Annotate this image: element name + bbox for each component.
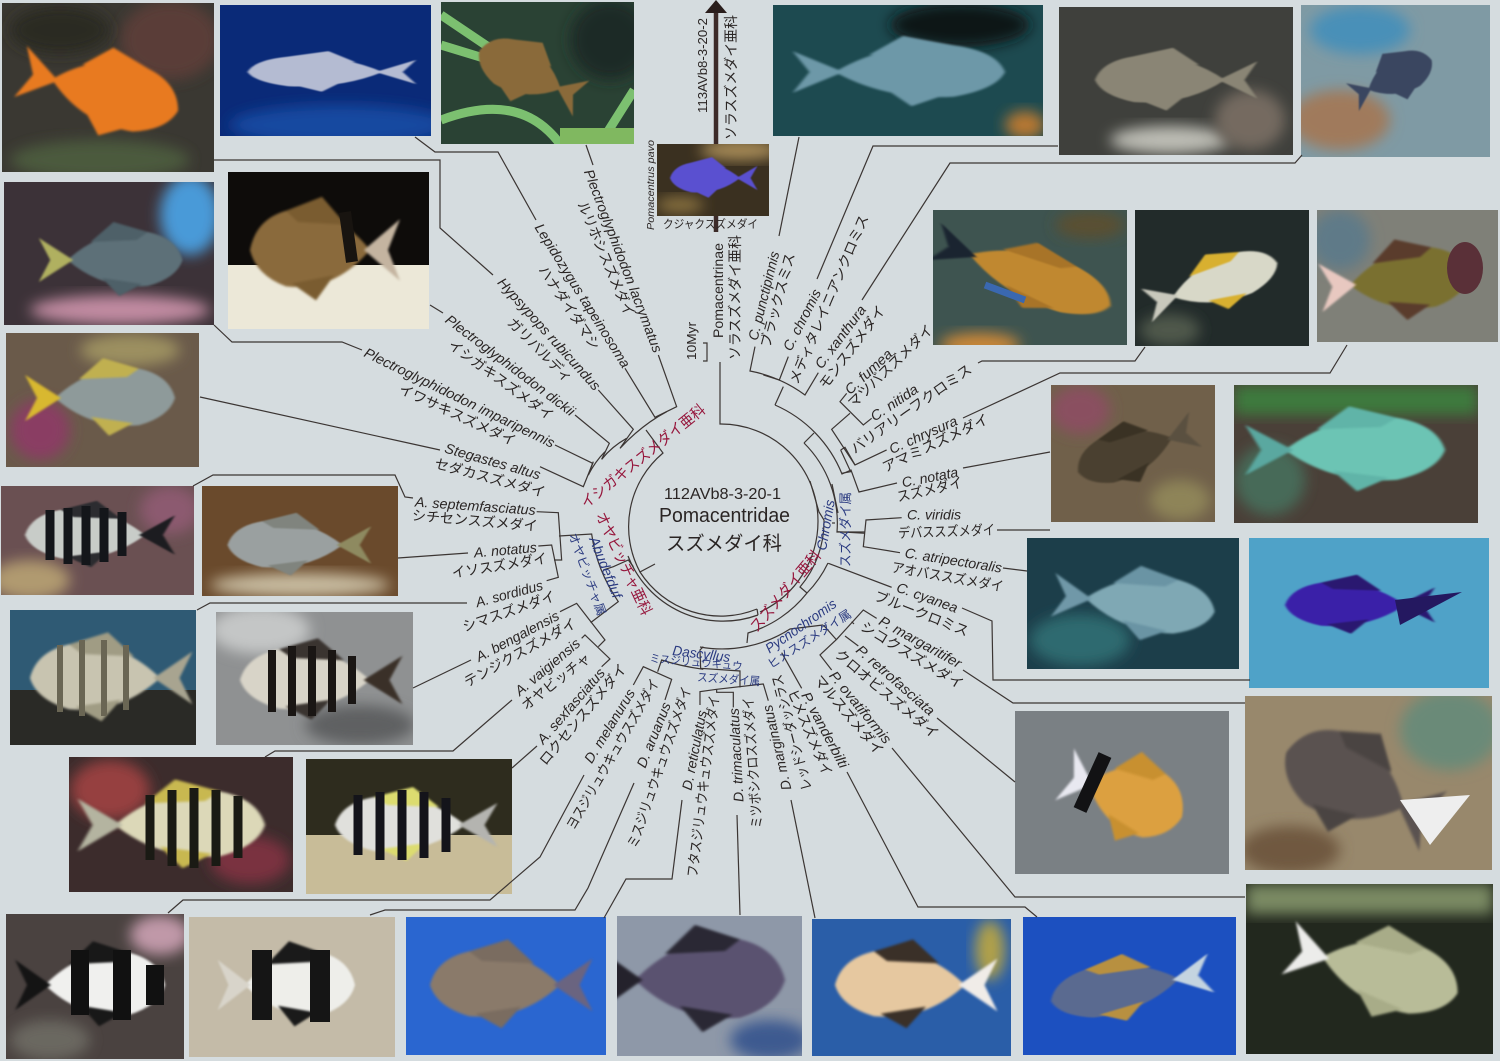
species label: A. notatus: A. notatus (472, 539, 537, 561)
center title: スズメダイ科 (666, 533, 782, 555)
photo: P. vanderbilti (1023, 917, 1236, 1055)
species label: P. vanderbilti: ヒメスズメダイ (785, 687, 835, 778)
subfamily labels: オヤビッチャ亜科 (592, 510, 655, 618)
genus label Dascyllus: ミスジリュウキュウ (649, 652, 743, 673)
top clade label (695, 15, 739, 140)
photo: Hypsypops rubicundus (4, 182, 214, 325)
photo: C. xanthura (1301, 5, 1490, 157)
photo: C. cyanea (1249, 538, 1489, 688)
photo: D. aruanus (189, 917, 395, 1057)
species label: C. chromis: メディタレイニアンクロミス (786, 212, 871, 386)
Pomacentrus pavo label (646, 140, 758, 231)
species label: C. chrysura: C. chrysura (887, 412, 960, 457)
species label: P. lacrymatus: Plectroglyphidodon lacrymatus (581, 167, 666, 355)
species label: L. tapeinosoma: ハナダイダマシ (535, 263, 603, 353)
photo: A. vaigiensis (69, 757, 293, 892)
photo: C. chrysura (1317, 210, 1498, 342)
species label: C. viridis: C. viridis (907, 506, 961, 522)
species label: C. chrysura: アマミスズメダイ (880, 411, 991, 475)
species label: D. trimaculatus: ミツボシクロスズメダイ (740, 697, 765, 829)
photo: A. sordidus (10, 610, 196, 745)
tree: Stegastes and Plectroglyphidodon clade (540, 355, 677, 487)
center title: 112AVb8-3-20-1 (664, 486, 781, 503)
subfamily labels: イシガキスズメダイ亜科 (578, 401, 709, 512)
species label: C. nitida: バリアリーフクロミス (847, 361, 975, 457)
leader lines from species labels to photos (168, 137, 1347, 918)
tree: Chromis lower and Pycnochromis clade (782, 518, 902, 688)
species label: A. sexfasciatus: ロクセンスズメダイ (536, 661, 630, 768)
tree: Chromis upper clade (750, 347, 887, 473)
photo: C. atripectoralis (1027, 538, 1239, 669)
photo: D. marginatus (812, 919, 1011, 1056)
scale bar (703, 343, 707, 361)
species label: H. rubicundus: Hypsypops rubicundus (494, 274, 604, 394)
species label: D. aruanus: D. aruanus (633, 700, 674, 770)
genus label Pycnochromis: Pycnochromis (762, 595, 839, 656)
species label: C. cyanea: C. cyanea (894, 579, 960, 616)
species label: D. melanurus: ヨスジリュウキュウスズメダイ (563, 676, 662, 832)
genus label Dascyllus: Dascyllus (672, 642, 731, 665)
species label: P. ovatiformis: マルスズメダイ (811, 672, 887, 758)
species label: A. septemfasciatus: シチセンスズメダイ (411, 507, 538, 534)
species label: A. bengalensis: A. bengalensis (472, 607, 562, 665)
genus label Chromis (813, 492, 853, 567)
species label: C. notata: C. notata (900, 464, 960, 490)
species label: A. septemfasciatus (411, 493, 538, 534)
photo: garibaldi (2, 3, 214, 172)
species label: C. xanthura: モンスズメダイ (816, 302, 889, 392)
genus label Abudefduf (566, 531, 626, 617)
species label: A. sordidus: A. sordidus (473, 577, 545, 610)
species label: P. dickii: イシガキスズメダイ (445, 336, 557, 423)
species label: D. marginatus: レッドシーダッシラス (768, 673, 815, 792)
tree: Dascyllus clade (633, 647, 768, 707)
subfamily labels (578, 401, 825, 636)
subfamily labels: スズメダイ亜科 (747, 547, 825, 636)
photo: Plectroglyphidodon imparipennis (6, 333, 199, 467)
subfamily label Pomacentrinae: ソラスズメダイ亜科 (727, 235, 743, 360)
center title (659, 486, 790, 555)
photo: A. sexfasciatus (306, 759, 512, 894)
species label: A. septemfasciatus: A. septemfasciatus (413, 493, 536, 518)
species label: P. margaritifer: P. margaritifer (876, 613, 966, 672)
species label: D. reticulatus: フタスジリュウキュウスズメダイ (684, 694, 722, 878)
species label: C. nitida: C. nitida (867, 381, 921, 424)
species label: S. altus: Stegastes altus (443, 440, 543, 482)
photo: P. ovatiformis (1246, 884, 1493, 1054)
species label: C. viridis (898, 506, 995, 541)
photo: C. viridis (1234, 385, 1478, 523)
species label: L. tapeinosoma: Lepidozygus tapeinosoma (532, 221, 634, 371)
center title: Pomacentridae (659, 505, 790, 527)
species label: P. retrofasciata: クロオビスズメダイ (832, 646, 942, 742)
photo: Plectroglyphidodon dickii (228, 172, 429, 329)
species label: C. notata: スズメダイ (895, 474, 964, 505)
species label: C. fumea: C. fumea (841, 345, 895, 397)
photo: C. nitida (1135, 210, 1309, 346)
species label: C. atripectoralis (891, 545, 1005, 594)
species label: P. imparipennis: イワサキスズメダイ (397, 381, 518, 449)
species label: P. imparipennis: Plectroglyphidodon imparipennis (362, 344, 557, 451)
photo: C. chromis (1059, 7, 1293, 155)
species label: S. altus: セダカスズメダイ (433, 455, 547, 500)
photo: D. trimaculatus (617, 916, 802, 1056)
photo: Pomacentrus pavo (657, 144, 769, 216)
genus label Chromis: Chromis (813, 499, 838, 552)
species label: P. retrofasciata: P. retrofasciata (853, 642, 938, 719)
subfamily label Pomacentrinae (710, 235, 743, 360)
species label: A. sexfasciatus: A. sexfasciatus (533, 665, 608, 748)
species label: A. sordidus: シマスズメダイ (460, 588, 557, 635)
top clade label: ソラスズメダイ亜科 (723, 15, 739, 140)
photo: D. reticulatus (406, 917, 606, 1055)
photo: Plectroglyphidodon lacrymatus (441, 2, 634, 144)
Pomacentrus pavo label: Pomacentrus pavo (646, 140, 657, 230)
photo: C. notata (1051, 385, 1215, 522)
species label: P. lacrymatus: ルリホシスズメダイ (575, 199, 637, 318)
species label: P. ovatiformis: P. ovatiformis (826, 668, 895, 747)
species label: C. xanthura: C. xanthura (811, 302, 869, 372)
species label: C. atripectoralis: C. atripectoralis (904, 545, 1003, 576)
species label: P. vanderbilti: P. vanderbilti (798, 689, 852, 771)
species label: D. reticulatus: D. reticulatus (679, 709, 710, 791)
species label: C. punctipinnis: C. punctipinnis (745, 250, 782, 342)
species label: D. aruanus: ミスジリュウキュウスズメダイ (624, 685, 695, 850)
species label: C. cyanea: ブルークロミス (872, 588, 971, 639)
species label: A. vaigiensis: A. vaigiensis (511, 635, 583, 699)
photo: A. notatus (202, 486, 398, 596)
species label: P. margaritifer: シコクスズメダイ (858, 618, 966, 692)
arrow to outgroup (705, 0, 727, 232)
photo: P. margaritifer (1015, 711, 1229, 874)
species label: C. fumea: マツバスズメダイ (844, 321, 936, 411)
photo: Lepidozygus tapeinosoma (220, 5, 431, 136)
species label: H. rubicundus: ガリバルディ (504, 314, 576, 386)
photo: A. bengalensis (216, 612, 413, 745)
species label: C. chromis: C. chromis (779, 286, 824, 353)
genus label Dascyllus: スズメダイ属 (697, 670, 761, 688)
genus label Abudefduf: オヤビッチャ属 (566, 531, 609, 617)
photo: P. retrofasciata (1245, 696, 1492, 870)
scale label: 10Myr (684, 321, 699, 360)
species label: D. marginatus: D. marginatus (759, 704, 794, 792)
photo: D. melanurus (6, 914, 184, 1059)
genus label Abudefduf: Abudefduf (586, 533, 626, 602)
species label: A. notatus: イソスズメダイ (451, 550, 548, 581)
tree: Abudefduf clade (537, 512, 633, 667)
species label: C. punctipinnis: ブラックスミス (757, 251, 798, 349)
species label: D. trimaculatus (726, 697, 765, 829)
top clade label: 113AVb8-3-20-2 (695, 18, 710, 113)
Pomacentrus pavo label: クジャクスズメダイ (663, 217, 758, 231)
species label: P. dickii: Plectroglyphidodon dickii (442, 311, 579, 420)
subfamily label Pomacentrinae: Pomacentrinae (710, 243, 726, 338)
species label: D. melanurus: D. melanurus (581, 686, 638, 766)
genus label Dascyllus (649, 642, 761, 688)
species label: C. atripectoralis: アオバススズメダイ (891, 559, 1005, 594)
genus label Chromis: スズメダイ属 (838, 492, 853, 567)
photo: C. fumea (933, 210, 1127, 345)
species label: A. bengalensis: テンジクスズメダイ (461, 615, 579, 690)
photo: C. punctipinnis (773, 5, 1043, 136)
genus label Pycnochromis: ヒメスズメダイ属 (764, 606, 854, 672)
phylogenetic tree: central arcs (628, 362, 897, 649)
species label: A. vaigiensis: オヤビッチャ (518, 650, 593, 713)
species label: C. viridis: デバススズメダイ (898, 522, 995, 541)
species label: D. trimaculatus: D. trimaculatus (726, 708, 746, 802)
photo: A. septemfasciatus (1, 486, 194, 595)
